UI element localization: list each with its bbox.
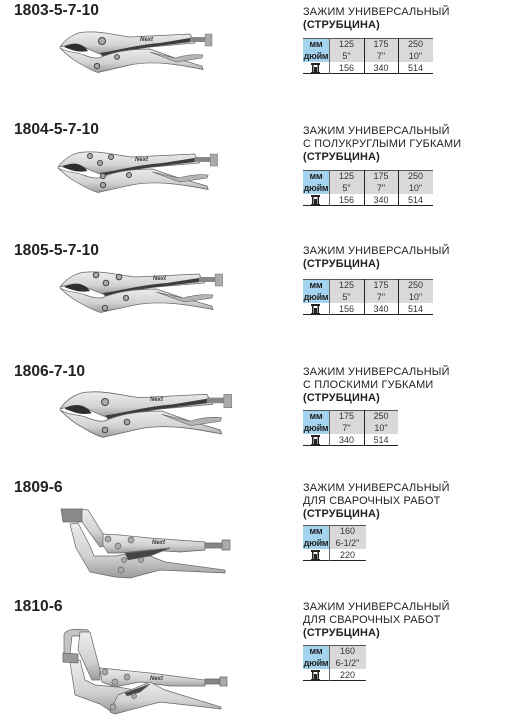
table 1803: дюйм <box>304 51 328 61</box>
table 1805: 125 <box>339 280 354 290</box>
table 1803: 10" <box>409 51 422 61</box>
heading 1810: (СТРУБЦИНА) <box>303 627 380 639</box>
heading 1809 <box>303 481 450 520</box>
heading 1803: ЗАЖИМ УНИВЕРСАЛЬНЫЙ <box>303 6 450 18</box>
table 1805: 156 <box>339 304 354 314</box>
table 1804: 156 <box>339 195 354 205</box>
heading 1810: ДЛЯ СВАРОЧНЫХ РАБОТ <box>303 614 441 626</box>
table 1804: 340 <box>373 195 389 205</box>
table 1810: 220 <box>340 670 355 680</box>
table 1804: мм <box>310 171 322 181</box>
table 1810: дюйм <box>304 658 328 668</box>
table 1804: 250 <box>408 171 423 181</box>
table 1804: 5" <box>342 183 351 193</box>
table 1809: 220 <box>340 550 355 560</box>
table 1809: дюйм <box>304 538 328 548</box>
table 1803: мм <box>310 39 322 49</box>
icon: locking pliers 1805 <box>60 272 223 312</box>
table 1805: мм <box>310 280 322 290</box>
table 1805: 250 <box>408 280 423 290</box>
heading 1809: (СТРУБЦИНА) <box>303 508 380 520</box>
table 1809: 6-1/2" <box>336 538 359 548</box>
icon: locking pliers 1804 <box>58 152 218 192</box>
table 1806: 10" <box>374 423 388 433</box>
table 1810: 6-1/2" <box>336 658 359 668</box>
code 1810: 1810-6 <box>14 598 63 615</box>
table 1803: 5" <box>342 51 351 61</box>
heading 1803: (СТРУБЦИНА) <box>303 19 380 31</box>
table 1803: 175 <box>373 39 389 49</box>
heading 1809: ЗАЖИМ УНИВЕРСАЛЬНЫЙ <box>303 482 450 494</box>
table 1805 <box>303 279 433 315</box>
table 1803: 125 <box>339 39 354 49</box>
icon: welding clamp 1810 <box>63 629 227 714</box>
heading 1806: С ПЛОСКИМИ ГУБКАМИ <box>303 379 433 391</box>
table 1803: 156 <box>339 63 354 73</box>
table 1806: 250 <box>373 411 389 421</box>
table 1804 <box>303 170 433 206</box>
heading 1810 <box>303 600 450 639</box>
icon: welding clamp 1809 <box>61 509 230 578</box>
table 1805: 175 <box>373 280 389 290</box>
heading 1804 <box>303 124 461 163</box>
table 1809: 160 <box>340 526 355 536</box>
heading 1806 <box>303 365 450 404</box>
table 1805: 514 <box>408 304 423 314</box>
table 1810 <box>303 645 366 681</box>
table 1804: 125 <box>339 171 354 181</box>
table 1803: 7" <box>377 51 385 61</box>
code 1805: 1805-5-7-10 <box>14 242 99 259</box>
heading 1804: (СТРУБЦИНА) <box>303 151 380 163</box>
icon: locking pliers 1806 <box>60 392 232 437</box>
table 1803: 514 <box>408 63 423 73</box>
table 1805: 7" <box>377 292 385 302</box>
icon: welding clamp 1810: Next <box>150 676 164 682</box>
icon: welding clamp 1809: Next <box>152 540 166 546</box>
code 1809: 1809-6 <box>14 479 63 496</box>
table 1806 <box>303 410 398 446</box>
table 1805: 10" <box>409 292 422 302</box>
icon: locking pliers 1804: Next <box>135 157 149 163</box>
table 1804: 10" <box>409 183 422 193</box>
heading 1805: (СТРУБЦИНА) <box>303 258 380 270</box>
heading 1806: ЗАЖИМ УНИВЕРСАЛЬНЫЙ <box>303 366 450 378</box>
table 1803: 250 <box>408 39 423 49</box>
table 1810: 160 <box>340 646 355 656</box>
heading 1804: ЗАЖИМ УНИВЕРСАЛЬНЫЙ <box>303 125 450 137</box>
code 1806: 1806-7-10 <box>14 363 85 380</box>
heading 1805 <box>303 244 450 270</box>
heading 1806: (СТРУБЦИНА) <box>303 392 380 404</box>
table 1809: мм <box>310 526 322 536</box>
table 1806: 514 <box>373 435 389 445</box>
table 1805: 5" <box>342 292 351 302</box>
table 1809 <box>303 525 366 561</box>
icon: locking pliers 1803: Next <box>140 37 154 43</box>
icon: locking pliers 1806: Next <box>150 397 164 403</box>
icon: locking pliers 1803 <box>60 32 212 73</box>
table 1806: мм <box>310 411 322 421</box>
table 1804: 514 <box>408 195 423 205</box>
table 1804: дюйм <box>304 183 328 193</box>
table 1804: 175 <box>373 171 389 181</box>
table 1806: дюйм <box>304 423 328 433</box>
table 1803: 340 <box>373 63 389 73</box>
table 1805: дюйм <box>304 292 328 302</box>
heading 1804: С ПОЛУКРУГЛЫМИ ГУБКАМИ <box>303 138 461 150</box>
table 1805: 340 <box>373 304 389 314</box>
heading 1805: ЗАЖИМ УНИВЕРСАЛЬНЫЙ <box>303 245 450 257</box>
table 1806: 7" <box>342 423 351 433</box>
table 1804: 7" <box>377 183 385 193</box>
table 1806: 340 <box>339 435 354 445</box>
table 1806: 175 <box>339 411 354 421</box>
heading 1810: ЗАЖИМ УНИВЕРСАЛЬНЫЙ <box>303 601 450 613</box>
heading 1803 <box>303 5 450 31</box>
heading 1809: ДЛЯ СВАРОЧНЫХ РАБОТ <box>303 495 441 507</box>
code 1803: 1803-5-7-10 <box>14 2 99 19</box>
table 1803 <box>303 38 433 74</box>
icon: locking pliers 1805: Next <box>153 276 167 282</box>
table 1810: мм <box>310 646 322 656</box>
code 1804: 1804-5-7-10 <box>14 121 99 138</box>
